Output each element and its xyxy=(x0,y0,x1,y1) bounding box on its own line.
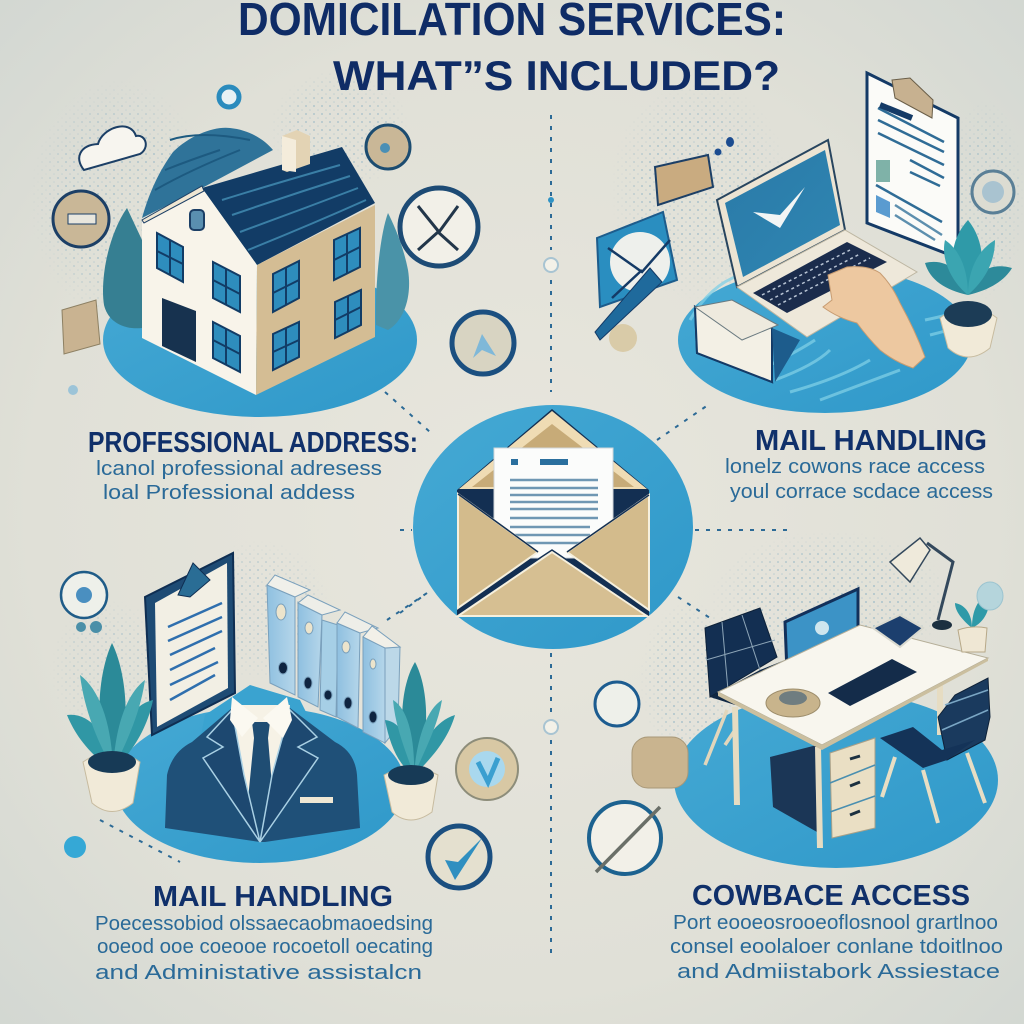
small icons xyxy=(589,582,1003,874)
connector lines xyxy=(100,115,790,960)
panel: coworking desk illustration xyxy=(589,538,1003,874)
panel: professional address illustration xyxy=(53,87,514,417)
text block: coworking access: consel eoolaloer conlane tdoitlnoo xyxy=(670,936,1003,958)
icon: pen tile xyxy=(595,212,677,352)
icon: left plant xyxy=(67,643,153,812)
icon: box xyxy=(695,300,800,382)
text block: professional address: loal Professional addess xyxy=(103,482,355,504)
icon: binders xyxy=(267,575,400,743)
heading: coworking access: COWBACE ACCESS xyxy=(692,880,970,912)
icon: cloud xyxy=(79,126,146,170)
icon: drawers xyxy=(830,738,875,838)
icon: house xyxy=(142,128,375,395)
icon: left chair xyxy=(705,608,785,765)
central disc xyxy=(413,405,693,649)
text block: mail handling right: youl corrace scdace access xyxy=(730,481,993,503)
text block: mail handling right: lonelz cowons race access xyxy=(725,456,985,478)
icon: clipboard xyxy=(145,553,235,735)
trees xyxy=(103,208,409,330)
panel: business suit illustration xyxy=(61,553,518,888)
small icons xyxy=(61,572,518,888)
icon: lamp xyxy=(890,538,953,630)
icon: storage bin xyxy=(770,745,817,832)
title: WHAT”S INCLUDED? xyxy=(333,52,780,99)
small icons xyxy=(655,137,1014,213)
heading: professional address: PROFESSIONAL ADDRESS: xyxy=(88,427,418,459)
platform disc xyxy=(674,692,998,868)
title xyxy=(238,0,786,99)
text block: professional address: lcanol professional adresess xyxy=(96,458,382,480)
text block: coworking access xyxy=(670,912,1003,983)
panel: laptop illustration xyxy=(595,73,1014,413)
text block: mail handling right xyxy=(725,456,993,503)
icon: clock xyxy=(400,188,478,266)
text block: mail handling left: Poecessobiod olssaecaobmaoedsing xyxy=(95,913,433,935)
panel: central envelope xyxy=(413,405,693,649)
icon: desk plant xyxy=(955,592,989,652)
icon: envelope xyxy=(457,409,649,617)
icon: right chair xyxy=(880,678,990,823)
platform disc xyxy=(115,707,405,863)
heading: mail handling right: MAIL HANDLING xyxy=(755,425,987,457)
icon: right plant xyxy=(384,662,455,820)
small icons xyxy=(53,87,514,395)
icon: hand xyxy=(823,267,925,368)
icon: monitor xyxy=(785,589,858,673)
platform disc xyxy=(678,267,972,413)
icon: business suit xyxy=(165,685,360,842)
platform disc xyxy=(103,263,417,417)
icon: clipboard document xyxy=(867,73,958,258)
icon: desk xyxy=(718,615,988,848)
text block: mail handling left: ooeod ooe coeooe rocoetoll oecating xyxy=(97,936,433,958)
text block: coworking access: Port eooeosrooeoflosnool grartlnoo xyxy=(673,912,998,934)
icon: plant in pot xyxy=(925,220,1012,357)
icon: laptop xyxy=(717,140,917,337)
text block: professional address xyxy=(96,458,382,504)
text block: mail handling left xyxy=(95,913,433,984)
text block: mail handling left: and Administative assistalcn xyxy=(95,962,422,984)
text block: coworking access: and Admiistabork Assiestace xyxy=(677,961,1000,983)
heading: mail handling left: MAIL HANDLING xyxy=(153,881,393,913)
